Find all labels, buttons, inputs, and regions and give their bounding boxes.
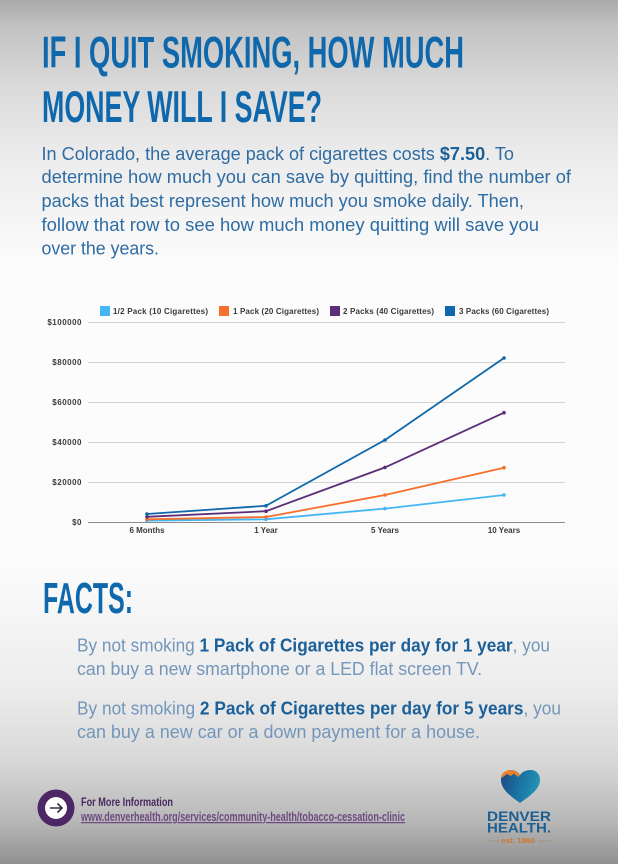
fact: 2 packs for 5 years: can buy a new car or a down payment for a house.: [77, 722, 480, 742]
x axis labels: 10 Years: [488, 526, 521, 535]
more information: [80, 795, 405, 824]
x axis labels: 5 Years: [371, 526, 399, 535]
fact: 1 pack for 1 year: can buy a new smartphone or a LED flat screen TV.: [77, 659, 482, 679]
x axis labels: [129, 526, 521, 535]
logo: Denver Health: est. 1860: [501, 838, 535, 845]
chart legend: 1 Pack (20 Cigarettes): [233, 307, 319, 316]
y axis labels: $80000: [52, 358, 82, 367]
chart legend: [100, 306, 549, 316]
x axis labels: 6 Months: [129, 526, 165, 535]
y axis labels: $40000: [52, 438, 82, 447]
icon: arrow in circle: [38, 790, 74, 826]
more information: www.denverhealth.org/services/community-health/tobacco-cessation-clinic: [80, 810, 405, 824]
intro paragraph: packs that best represent how much you smoke daily. Then,: [42, 191, 524, 211]
fact: 1 pack for 1 year: By not smoking 1 Pack of Cigarettes per day for 1 year, you: [77, 636, 550, 656]
series: 3 packs: [145, 356, 506, 516]
intro paragraph: follow that row to see how much money quitting will save you: [42, 215, 539, 235]
logo: Denver Health: [487, 770, 552, 845]
line chart: savings over time: [47, 306, 565, 535]
more information: For More Information: [81, 795, 173, 809]
fact: 1 pack for 1 year: [77, 636, 550, 679]
title: MONEY WILL I SAVE?: [42, 83, 322, 132]
intro paragraph: determine how much you can save by quitting, find the number of: [42, 167, 572, 187]
fact: 2 packs for 5 years: By not smoking 2 Pack of Cigarettes per day for 5 years, you: [77, 698, 561, 718]
chart legend: 3 Packs (60 Cigarettes): [459, 307, 549, 316]
intro paragraph: over the years.: [42, 238, 159, 258]
series: 1 pack: [145, 466, 506, 521]
y axis labels: $0: [72, 518, 82, 527]
icon: heart: [501, 770, 540, 803]
chart legend: 1/2 Pack (10 Cigarettes): [113, 307, 208, 316]
y axis labels: $20000: [52, 478, 82, 487]
chart legend: 2 Packs (40 Cigarettes): [343, 307, 434, 316]
intro paragraph: In Colorado, the average pack of cigarettes costs $7.50. To: [42, 144, 514, 164]
y axis labels: [47, 318, 82, 527]
logo: Denver Health: HEALTH.: [487, 821, 551, 836]
intro paragraph: [42, 144, 572, 258]
fact: 2 packs for 5 years: [77, 698, 561, 742]
series: half pack: [145, 493, 506, 522]
x axis labels: 1 Year: [254, 526, 278, 535]
logo: Denver Health: DENVER: [487, 809, 551, 824]
y axis labels: $60000: [52, 398, 82, 407]
facts heading: FACTS:: [43, 574, 133, 623]
y axis labels: $100000: [47, 318, 82, 327]
series: 2 packs: [145, 411, 506, 519]
title: [42, 28, 464, 132]
